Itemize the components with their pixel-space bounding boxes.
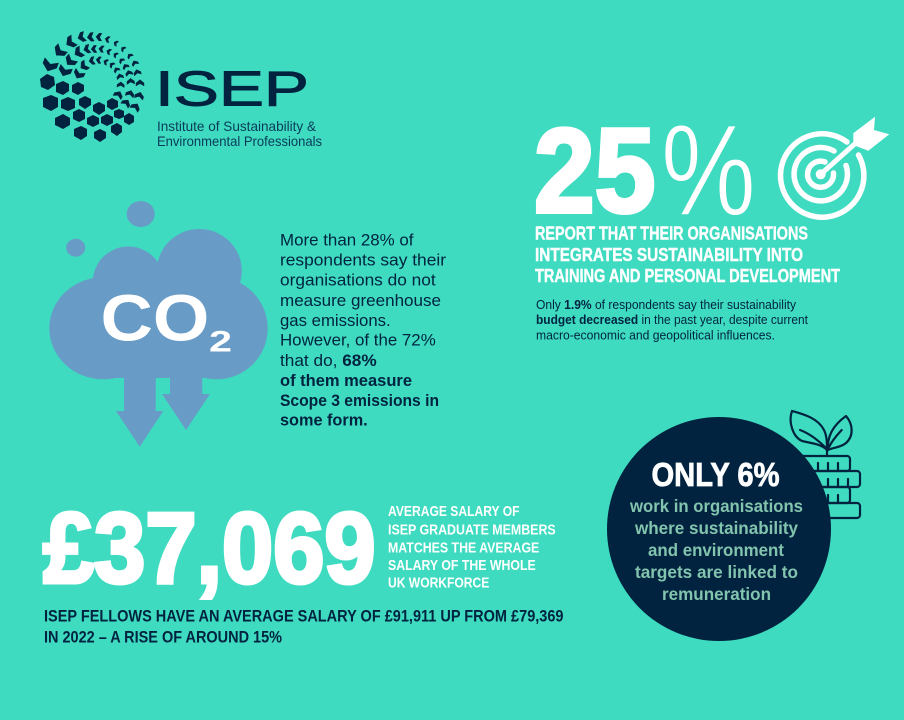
text block: greenhouse gas [280, 231, 446, 430]
CO2 label: 2 [209, 324, 232, 358]
text block: graduate salary: AVERAGE SALARY OF [388, 503, 520, 520]
text block: greenhouse gas: measure greenhouse [280, 291, 441, 310]
text block: greenhouse gas: Scope 3 emissions in [280, 391, 439, 410]
text block: greenhouse gas: organisations do not [280, 271, 436, 290]
callout body: targets are linked to [635, 562, 798, 582]
CO2 label: CO [100, 281, 209, 355]
callout body: work in organisations [629, 496, 803, 516]
headline stat: 25% [534, 98, 756, 243]
heading: training and development [535, 222, 841, 286]
text block: budget: macro-economic and geopolitical influences. [536, 328, 775, 342]
icon: CO2 cloud [49, 201, 268, 447]
logo: ISEP [40, 31, 322, 149]
logo wordmark: ISEP [155, 60, 309, 116]
text block: graduate salary: ISEP GRADUATE MEMBERS [388, 521, 556, 538]
callout heading: ONLY 6% [652, 456, 780, 493]
callout body: remuneration [662, 584, 771, 604]
text block: greenhouse gas: gas emissions. [280, 311, 391, 330]
text block: greenhouse gas: some form. [280, 411, 368, 430]
callout body [629, 496, 803, 604]
text block: fellows salary: IN 2022 – A RISE OF AROUND 15% [44, 627, 282, 646]
text block: greenhouse gas: More than 28% of [280, 231, 414, 250]
callout: only 6% [607, 417, 831, 641]
chevrons middle ring [57, 64, 73, 79]
text block: budget: Only 1.9% of respondents say their sustainability [536, 298, 797, 312]
percent sign: % [661, 98, 756, 243]
bubble large [127, 201, 155, 227]
logo strapline: Institute of Sustainability & [157, 118, 317, 134]
text block: budget: budget decreased in the past year, despite current [536, 313, 808, 327]
text block: fellows salary [44, 607, 564, 646]
icon: plant on coin stack [790, 411, 860, 518]
arrow: left down [116, 375, 163, 447]
icon: logo roundel [40, 31, 145, 142]
text block: greenhouse gas: of them measure [280, 371, 412, 390]
number 25: 25 [534, 104, 655, 238]
callout body: and environment [648, 540, 784, 560]
text block: graduate salary [388, 503, 556, 591]
text block: greenhouse gas: respondents say their [280, 251, 446, 270]
heading: training and development: INTEGRATES SUSTAINABILITY INTO [535, 244, 803, 265]
text block: graduate salary: MATCHES THE AVERAGE [388, 539, 539, 556]
logo strapline [157, 118, 322, 149]
logo strapline: Environmental Professionals [157, 133, 322, 149]
arrow: right down [162, 375, 210, 430]
text block: fellows salary: ISEP FELLOWS HAVE AN AVERAGE SALARY OF £91,911 UP FROM £79,369 [44, 607, 564, 626]
chevrons outer ring [41, 57, 59, 74]
text block: greenhouse gas: However, of the 72% [280, 331, 436, 350]
text block: graduate salary: UK WORKFORCE [388, 574, 489, 591]
text block: graduate salary: SALARY OF THE WHOLE [388, 557, 536, 574]
icon: target with arrow [781, 117, 889, 217]
callout body: where sustainability [634, 518, 798, 538]
big number: salary: £37,069 [43, 493, 376, 604]
text block: budget [536, 298, 808, 342]
chevrons inner ring [72, 68, 86, 81]
heading: training and development: REPORT THAT THEIR ORGANISATIONS [535, 222, 808, 243]
text block: greenhouse gas: that do, 68% [280, 351, 377, 370]
cloud body [49, 229, 268, 379]
bubble small [66, 239, 85, 257]
